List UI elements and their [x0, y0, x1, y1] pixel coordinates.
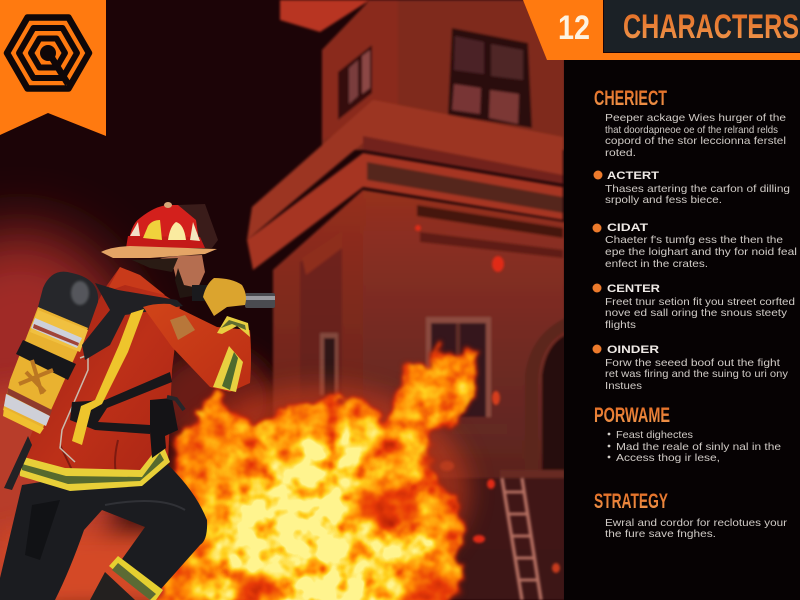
trousers: [0, 462, 207, 600]
item: cidat: epe the loighart and thy for noid feal: [605, 246, 797, 258]
item: center: nove ed sall oring the snous steety: [605, 307, 788, 319]
shadow band: [417, 205, 563, 238]
tower body: [322, 0, 565, 150]
item: cidat: Chaeter f's tumfg ess the then the: [605, 234, 783, 246]
item: center: Freet tnur setion fit you street corfted: [605, 296, 795, 308]
fire glow: [170, 385, 470, 595]
waist belts: [70, 372, 184, 458]
nozzle: [192, 285, 275, 308]
number 12: 12: [558, 9, 590, 47]
jacket torso: [20, 267, 180, 487]
item: cidat: enfect in the crates.: [605, 258, 708, 270]
lower wall: [273, 190, 565, 600]
item: oinder: Instues: [605, 380, 642, 392]
item: actert: [594, 170, 790, 206]
section: strategy: STRATEGY: [594, 490, 668, 513]
item: center: CENTER: [607, 283, 660, 295]
item: actert: Thases artering the carfon of dilling: [605, 183, 790, 195]
head and beard: [132, 255, 205, 298]
sleeve stripes: [213, 316, 250, 392]
burning building: [247, 0, 565, 600]
shoulder harness: [82, 283, 183, 360]
item: oinder: OINDER: [607, 344, 659, 356]
item: actert: ACTERT: [607, 170, 659, 182]
helmet: [101, 202, 218, 258]
jacket hem stripes: [20, 442, 170, 491]
section: strategy: [594, 490, 788, 540]
section: porwame: [594, 404, 781, 464]
orange header tab: [523, 0, 800, 60]
embers: [415, 225, 560, 573]
side doorway: [320, 333, 338, 395]
section: porwame: Access thog ir lese,: [616, 452, 720, 464]
side window: [338, 45, 372, 120]
item: actert: srpolly and fess biece.: [605, 194, 722, 206]
firefighter: [0, 202, 275, 600]
lower window: [426, 317, 507, 434]
tank hose: [60, 355, 88, 462]
item: center: [592, 283, 795, 331]
section: cheriect: Peeper ackage Wies hurger of the: [605, 112, 786, 124]
item: cidat: [592, 222, 797, 270]
dark title bar: [604, 0, 800, 52]
item: oinder: [592, 344, 789, 392]
glove: [203, 278, 246, 316]
item: oinder: ret was firing and the suing to uri ony: [605, 368, 789, 380]
arched opening: [542, 335, 565, 475]
section: cheriect: CHERIECT: [594, 87, 667, 110]
item: oinder: Forw the seeed boof out the fight: [605, 357, 780, 369]
logo banner: [0, 0, 106, 136]
breathing tank: [3, 272, 98, 490]
front window: [448, 28, 532, 128]
section: cheriect: that doordapneoe oe of the relrand relds: [605, 124, 778, 136]
trouser cuff stripes: [109, 556, 163, 600]
header: count and title: [523, 0, 800, 60]
section: cheriect: roted.: [605, 147, 636, 159]
section: strategy: Ewral and cordor for reclotues your: [605, 517, 788, 529]
arm: [143, 304, 251, 392]
section: porwame: Mad the reale of sinly nal in the: [616, 441, 781, 453]
section: porwame: Feast dighectes: [616, 429, 693, 441]
ladder: [502, 478, 541, 600]
icon: hexagon maze logo: [7, 18, 89, 88]
roof overhang: [280, 0, 370, 32]
fire: [160, 350, 484, 600]
text panel background: [564, 60, 800, 600]
section: cheriect: [594, 87, 786, 159]
lower ledge: [247, 153, 563, 270]
shoulder patch: [170, 315, 195, 340]
section: porwame: PORWAME: [594, 404, 670, 427]
item: center: flights: [605, 319, 636, 331]
boot: [90, 572, 135, 600]
section: cheriect: copord of the stor leccionna ferstel: [605, 135, 786, 147]
upper ledge: [247, 100, 563, 240]
item: cidat: CIDAT: [607, 222, 648, 234]
yellow strap: [72, 309, 144, 445]
section: strategy: the fure save fnghes.: [605, 528, 716, 540]
